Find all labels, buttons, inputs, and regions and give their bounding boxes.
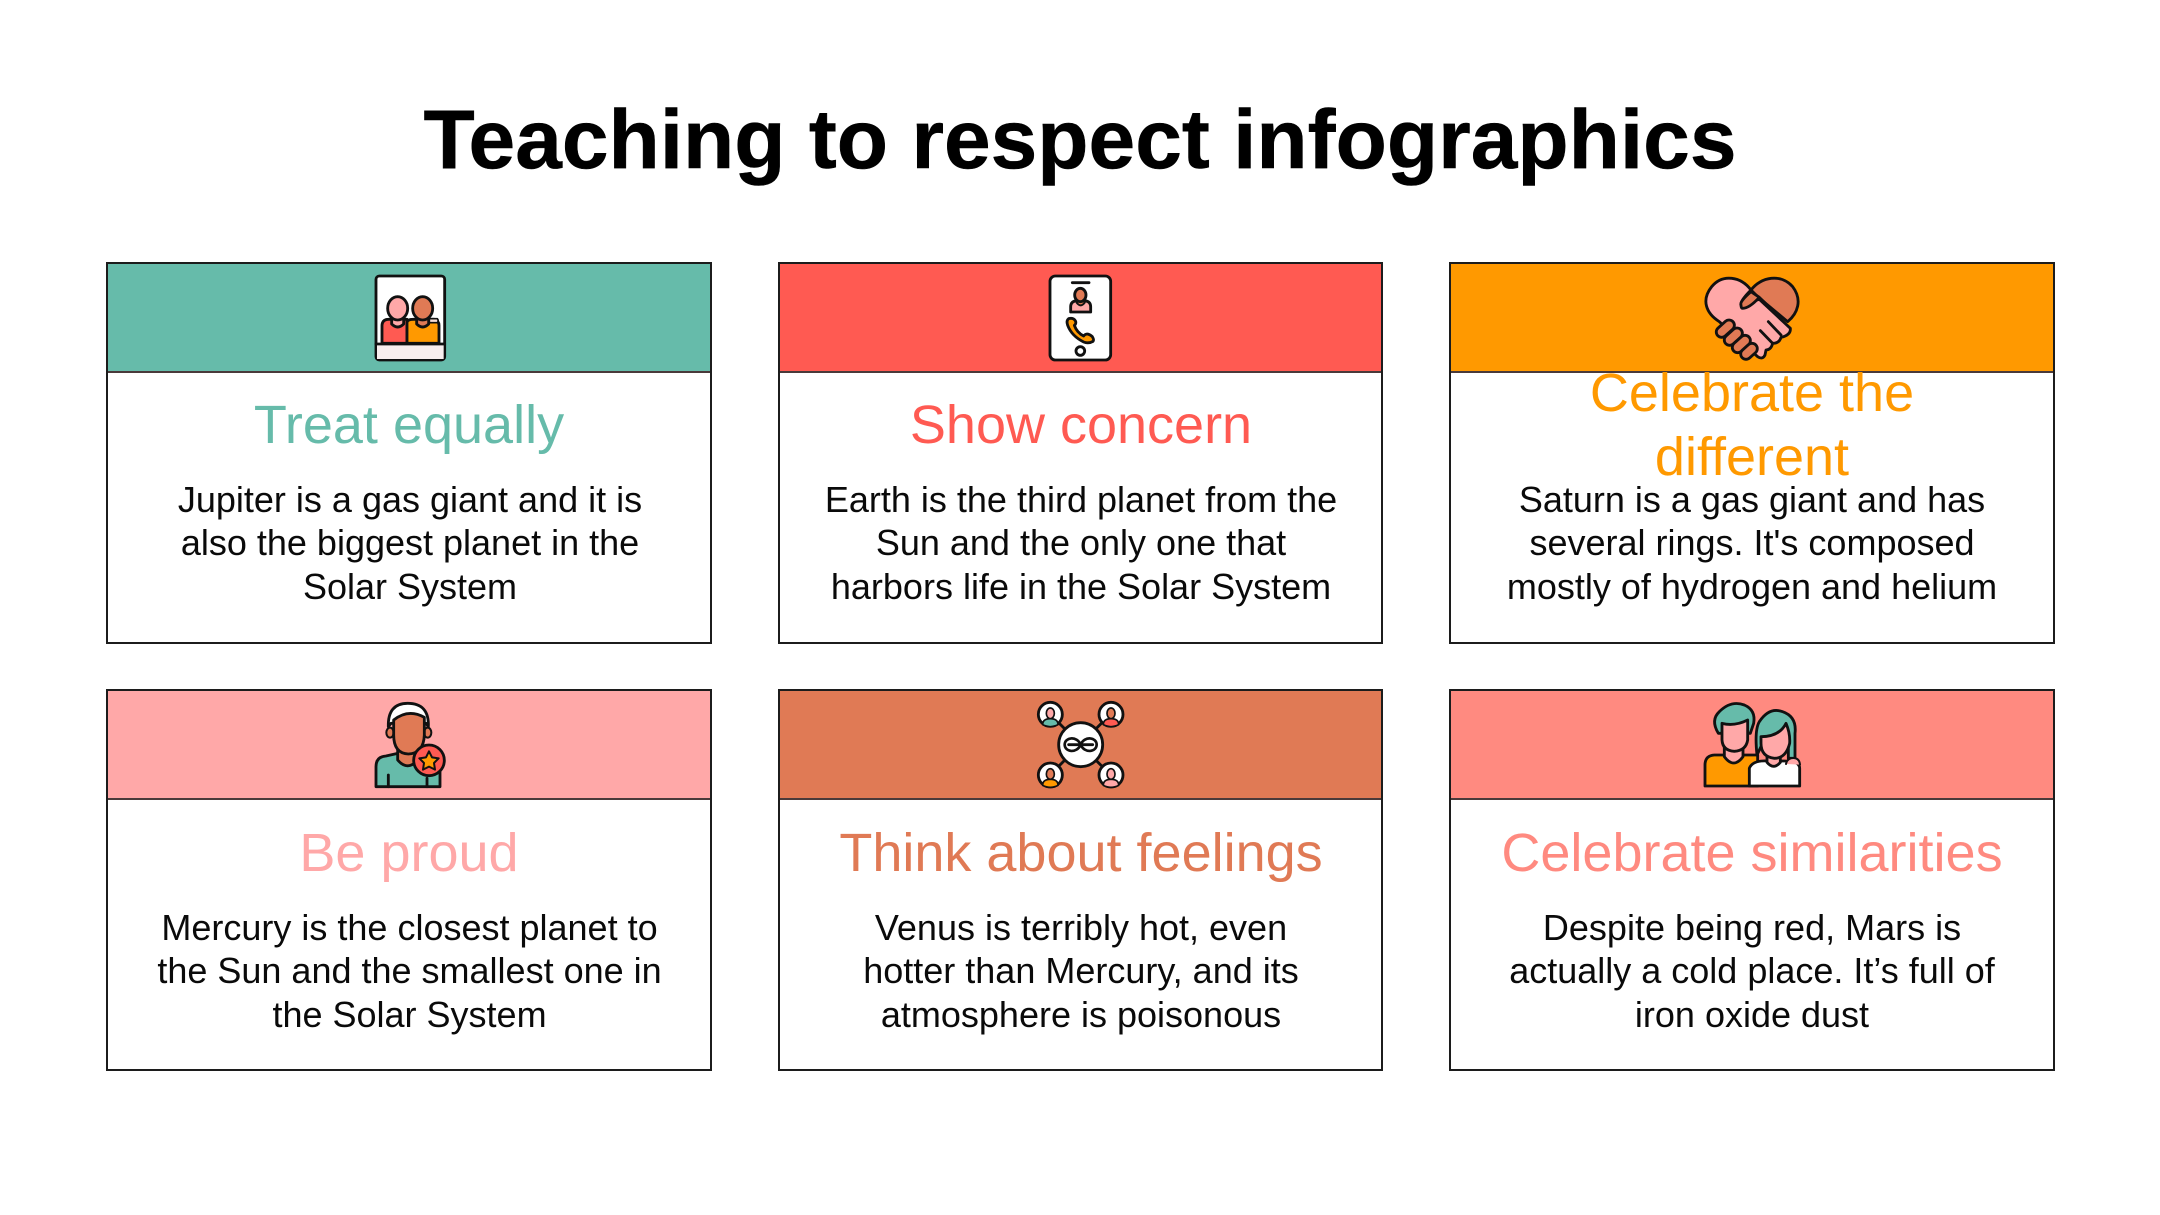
header band: treat equally <box>108 264 710 373</box>
icon: two people in a photo frame <box>374 274 446 362</box>
body text: celebrate similarities: Despite being red, Mars is <box>1543 907 1961 948</box>
icon: phone with contact <box>1048 274 1112 362</box>
body text: show concern <box>825 479 1337 607</box>
panel: show concern <box>778 262 1383 644</box>
body text: show concern: harbors life in the Solar System <box>831 566 1331 607</box>
panel: celebrate the different <box>1449 262 2055 644</box>
body text: be proud: the Solar System <box>272 994 547 1035</box>
body text: celebrate similarities: actually a cold place. It’s full of <box>1509 950 1995 991</box>
body text: think about feelings <box>863 907 1299 1035</box>
heading: treat equally: Treat equally <box>254 394 564 454</box>
icon: handshake heart <box>1704 276 1800 361</box>
icon: person with star badge <box>374 702 446 788</box>
body text: be proud: the Sun and the smallest one in <box>157 950 662 991</box>
header band: be proud <box>108 691 710 800</box>
body text: celebrate the different: mostly of hydrogen and helium <box>1507 566 1997 607</box>
heading: celebrate similarities: Celebrate similarities <box>1501 822 2003 882</box>
heading: celebrate the different <box>1590 363 1914 486</box>
panel: treat equally <box>106 262 712 644</box>
body text: treat equally: Solar System <box>303 566 517 607</box>
body text: celebrate similarities: iron oxide dust <box>1635 994 1869 1035</box>
icon: connected people network <box>1036 700 1124 788</box>
heading: think about feelings: Think about feelings <box>839 822 1323 882</box>
heading: be proud: Be proud <box>299 822 519 882</box>
body text: celebrate the different: Saturn is a gas giant and has <box>1519 479 1985 520</box>
icon: couple of people <box>1704 702 1802 788</box>
title: Teaching to respect infographics <box>424 92 1736 186</box>
heading: show concern: Show concern <box>910 394 1252 454</box>
body text: celebrate the different: several rings. It's composed <box>1529 522 1975 563</box>
body text: show concern: Earth is the third planet from the <box>825 479 1337 520</box>
panel: think about feelings <box>778 689 1383 1071</box>
body text: think about feelings: Venus is terribly hot, even <box>875 907 1287 948</box>
header band: think about feelings <box>780 691 1381 800</box>
heading: celebrate the different: Celebrate the <box>1590 363 1914 423</box>
body text: be proud <box>157 907 662 1035</box>
panel: celebrate similarities <box>1449 689 2055 1071</box>
header band: celebrate similarities <box>1451 691 2053 800</box>
body text: celebrate the different <box>1507 479 1997 607</box>
header band: show concern <box>780 264 1381 373</box>
panel: be proud <box>106 689 712 1071</box>
body text: treat equally: also the biggest planet in the <box>181 522 639 563</box>
body text: treat equally: Jupiter is a gas giant and it is <box>178 479 642 520</box>
body text: be proud: Mercury is the closest planet to <box>161 907 658 948</box>
header band: celebrate the different <box>1451 264 2053 373</box>
body text: show concern: Sun and the only one that <box>876 522 1286 563</box>
body text: celebrate similarities <box>1509 907 1995 1035</box>
heading: celebrate the different: different <box>1655 426 1849 486</box>
body text: treat equally <box>178 479 642 607</box>
body text: think about feelings: hotter than Mercury, and its <box>863 950 1299 991</box>
body text: think about feelings: atmosphere is poisonous <box>881 994 1281 1035</box>
